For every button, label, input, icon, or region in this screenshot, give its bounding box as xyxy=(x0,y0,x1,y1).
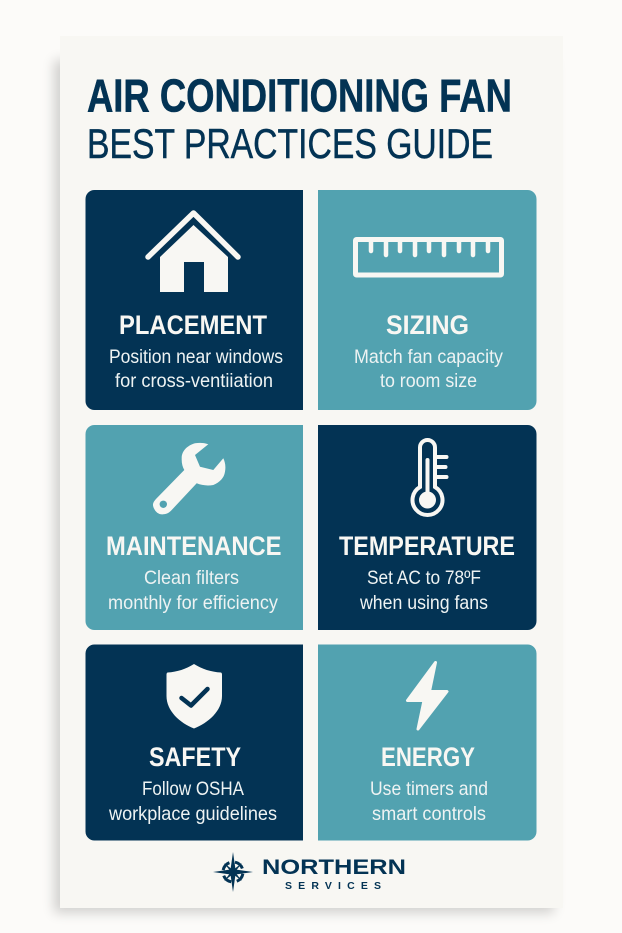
text: maintenance description: Clean filters xyxy=(144,567,239,589)
heading: placement: PLACEMENT xyxy=(119,310,267,340)
page shadow xyxy=(54,60,554,913)
text: safety description xyxy=(108,778,277,825)
heading: temperature: TEMPERATURE xyxy=(339,531,515,561)
icon: lightning bolt xyxy=(408,662,447,729)
heading: sizing: SIZING xyxy=(386,310,469,340)
icon: shield xyxy=(166,664,222,728)
text: maintenance description: monthly for efficiency xyxy=(108,592,278,614)
text: temperature description xyxy=(359,567,488,614)
title: BEST PRACTICES GUIDE xyxy=(87,120,493,167)
text: placement description xyxy=(109,346,283,392)
icon: ruler xyxy=(356,240,502,275)
text: sizing description: to room size xyxy=(380,370,477,392)
text: energy description: smart controls xyxy=(372,803,486,825)
text: safety description: workplace guidelines xyxy=(108,803,277,825)
text: energy description xyxy=(370,778,488,825)
title xyxy=(87,70,512,167)
panel: temperature xyxy=(318,425,536,630)
brand subtitle: SERVICES xyxy=(285,880,381,892)
panel: maintenance xyxy=(86,425,303,630)
icon: compass xyxy=(213,852,253,892)
panel: sizing xyxy=(318,190,536,410)
heading: safety: SAFETY xyxy=(149,742,241,772)
heading: maintenance: MAINTENANCE xyxy=(106,531,282,561)
panel: energy xyxy=(318,644,536,840)
text: placement description: for cross-ventiiation xyxy=(115,370,273,392)
text: energy description: Use timers and xyxy=(370,778,488,800)
text: sizing description: Match fan capacity xyxy=(354,346,503,368)
icon: house xyxy=(148,213,238,292)
heading: energy: ENERGY xyxy=(381,742,475,772)
panel: placement xyxy=(86,190,303,410)
title: AIR CONDITIONING FAN xyxy=(87,70,512,122)
icon: thermometer xyxy=(413,440,446,515)
text: temperature description: Set AC to 78ºF xyxy=(367,567,481,589)
text: placement description: Position near windows xyxy=(109,346,283,368)
text: sizing description xyxy=(354,346,503,392)
panel: safety xyxy=(86,644,303,840)
brand name: NORTHERN xyxy=(262,856,406,879)
footer logo xyxy=(213,852,406,892)
icon: wrench xyxy=(153,443,225,514)
paper sheet xyxy=(60,36,563,908)
text: temperature description: when using fans xyxy=(359,592,488,614)
text: safety description: Follow OSHA xyxy=(142,778,244,800)
text: maintenance description xyxy=(108,567,278,614)
